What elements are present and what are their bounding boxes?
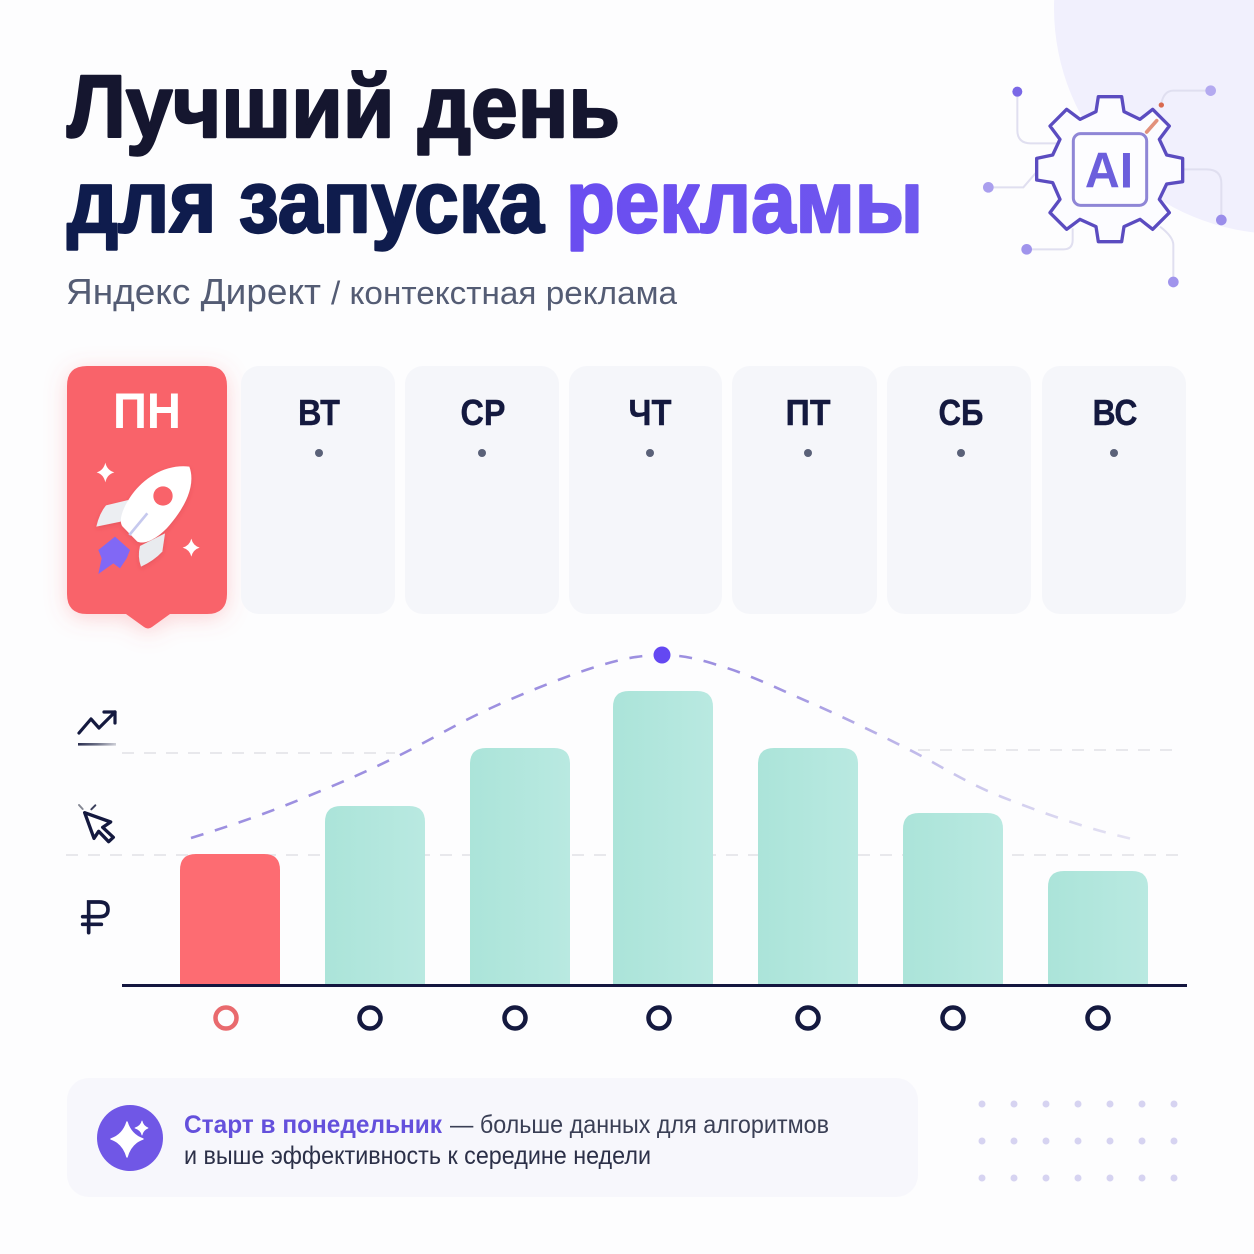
panel: Tuesday card: [241, 366, 395, 614]
subtitle: [66, 271, 677, 312]
bar: Thursday: [613, 691, 713, 985]
title: для запуска: [67, 152, 545, 251]
bar: Friday: [758, 748, 858, 985]
icon: rocket: [96, 463, 200, 574]
day label: ПН: ПН: [113, 383, 181, 439]
panel: Wednesday card: [405, 366, 559, 614]
title: рекламы: [566, 152, 923, 251]
panel: Saturday card: [887, 366, 1031, 614]
bar chart: [180, 691, 1148, 985]
chart axis: [122, 984, 1187, 987]
icon: growth trend: [78, 712, 116, 746]
panel: Saturday card: СБ: [938, 392, 984, 433]
callout text: — больше данных для алгоритмов: [450, 1111, 829, 1139]
title: [67, 57, 923, 251]
panel: callout: [67, 1078, 918, 1197]
panel: Thursday card: [569, 366, 722, 614]
title: Лучший день: [67, 57, 620, 156]
bar: Sunday: [1048, 871, 1148, 985]
panel: Tuesday card: ВТ: [298, 392, 340, 433]
panel: Friday card: ПТ: [786, 392, 830, 433]
icon: AI gear with circuit lines: [983, 85, 1227, 287]
subtitle: Яндекс Директ: [66, 271, 321, 312]
background circle: [1054, 0, 1254, 234]
decorative dot grid: [978, 1100, 1178, 1182]
panel: Friday card: [732, 366, 877, 614]
panel: Thursday card: ЧТ: [628, 392, 672, 433]
icon: sparkle badge: [97, 1105, 163, 1171]
bar: Monday: [180, 854, 280, 985]
bar: Saturday: [903, 813, 1003, 985]
day markers: [216, 1008, 1108, 1028]
bar: Wednesday: [470, 748, 570, 985]
panel: Wednesday card: СР: [460, 392, 506, 433]
icon: AI gear with circuit lines: AI: [1085, 142, 1133, 198]
subtitle: / контекстная реклама: [331, 275, 677, 311]
panel: Monday card: [67, 366, 227, 628]
callout text: Старт в понедельник: [184, 1111, 442, 1139]
panel: Sunday card: [1042, 366, 1186, 614]
icon: click cursor: [79, 805, 113, 842]
callout text: и выше эффективность к середине недели: [184, 1142, 651, 1170]
bar: Tuesday: [325, 806, 425, 985]
callout text: [184, 1111, 829, 1170]
icon: ruble: [83, 902, 108, 933]
panel: Sunday card: ВС: [1092, 392, 1138, 433]
trend curve: [191, 641, 1137, 840]
